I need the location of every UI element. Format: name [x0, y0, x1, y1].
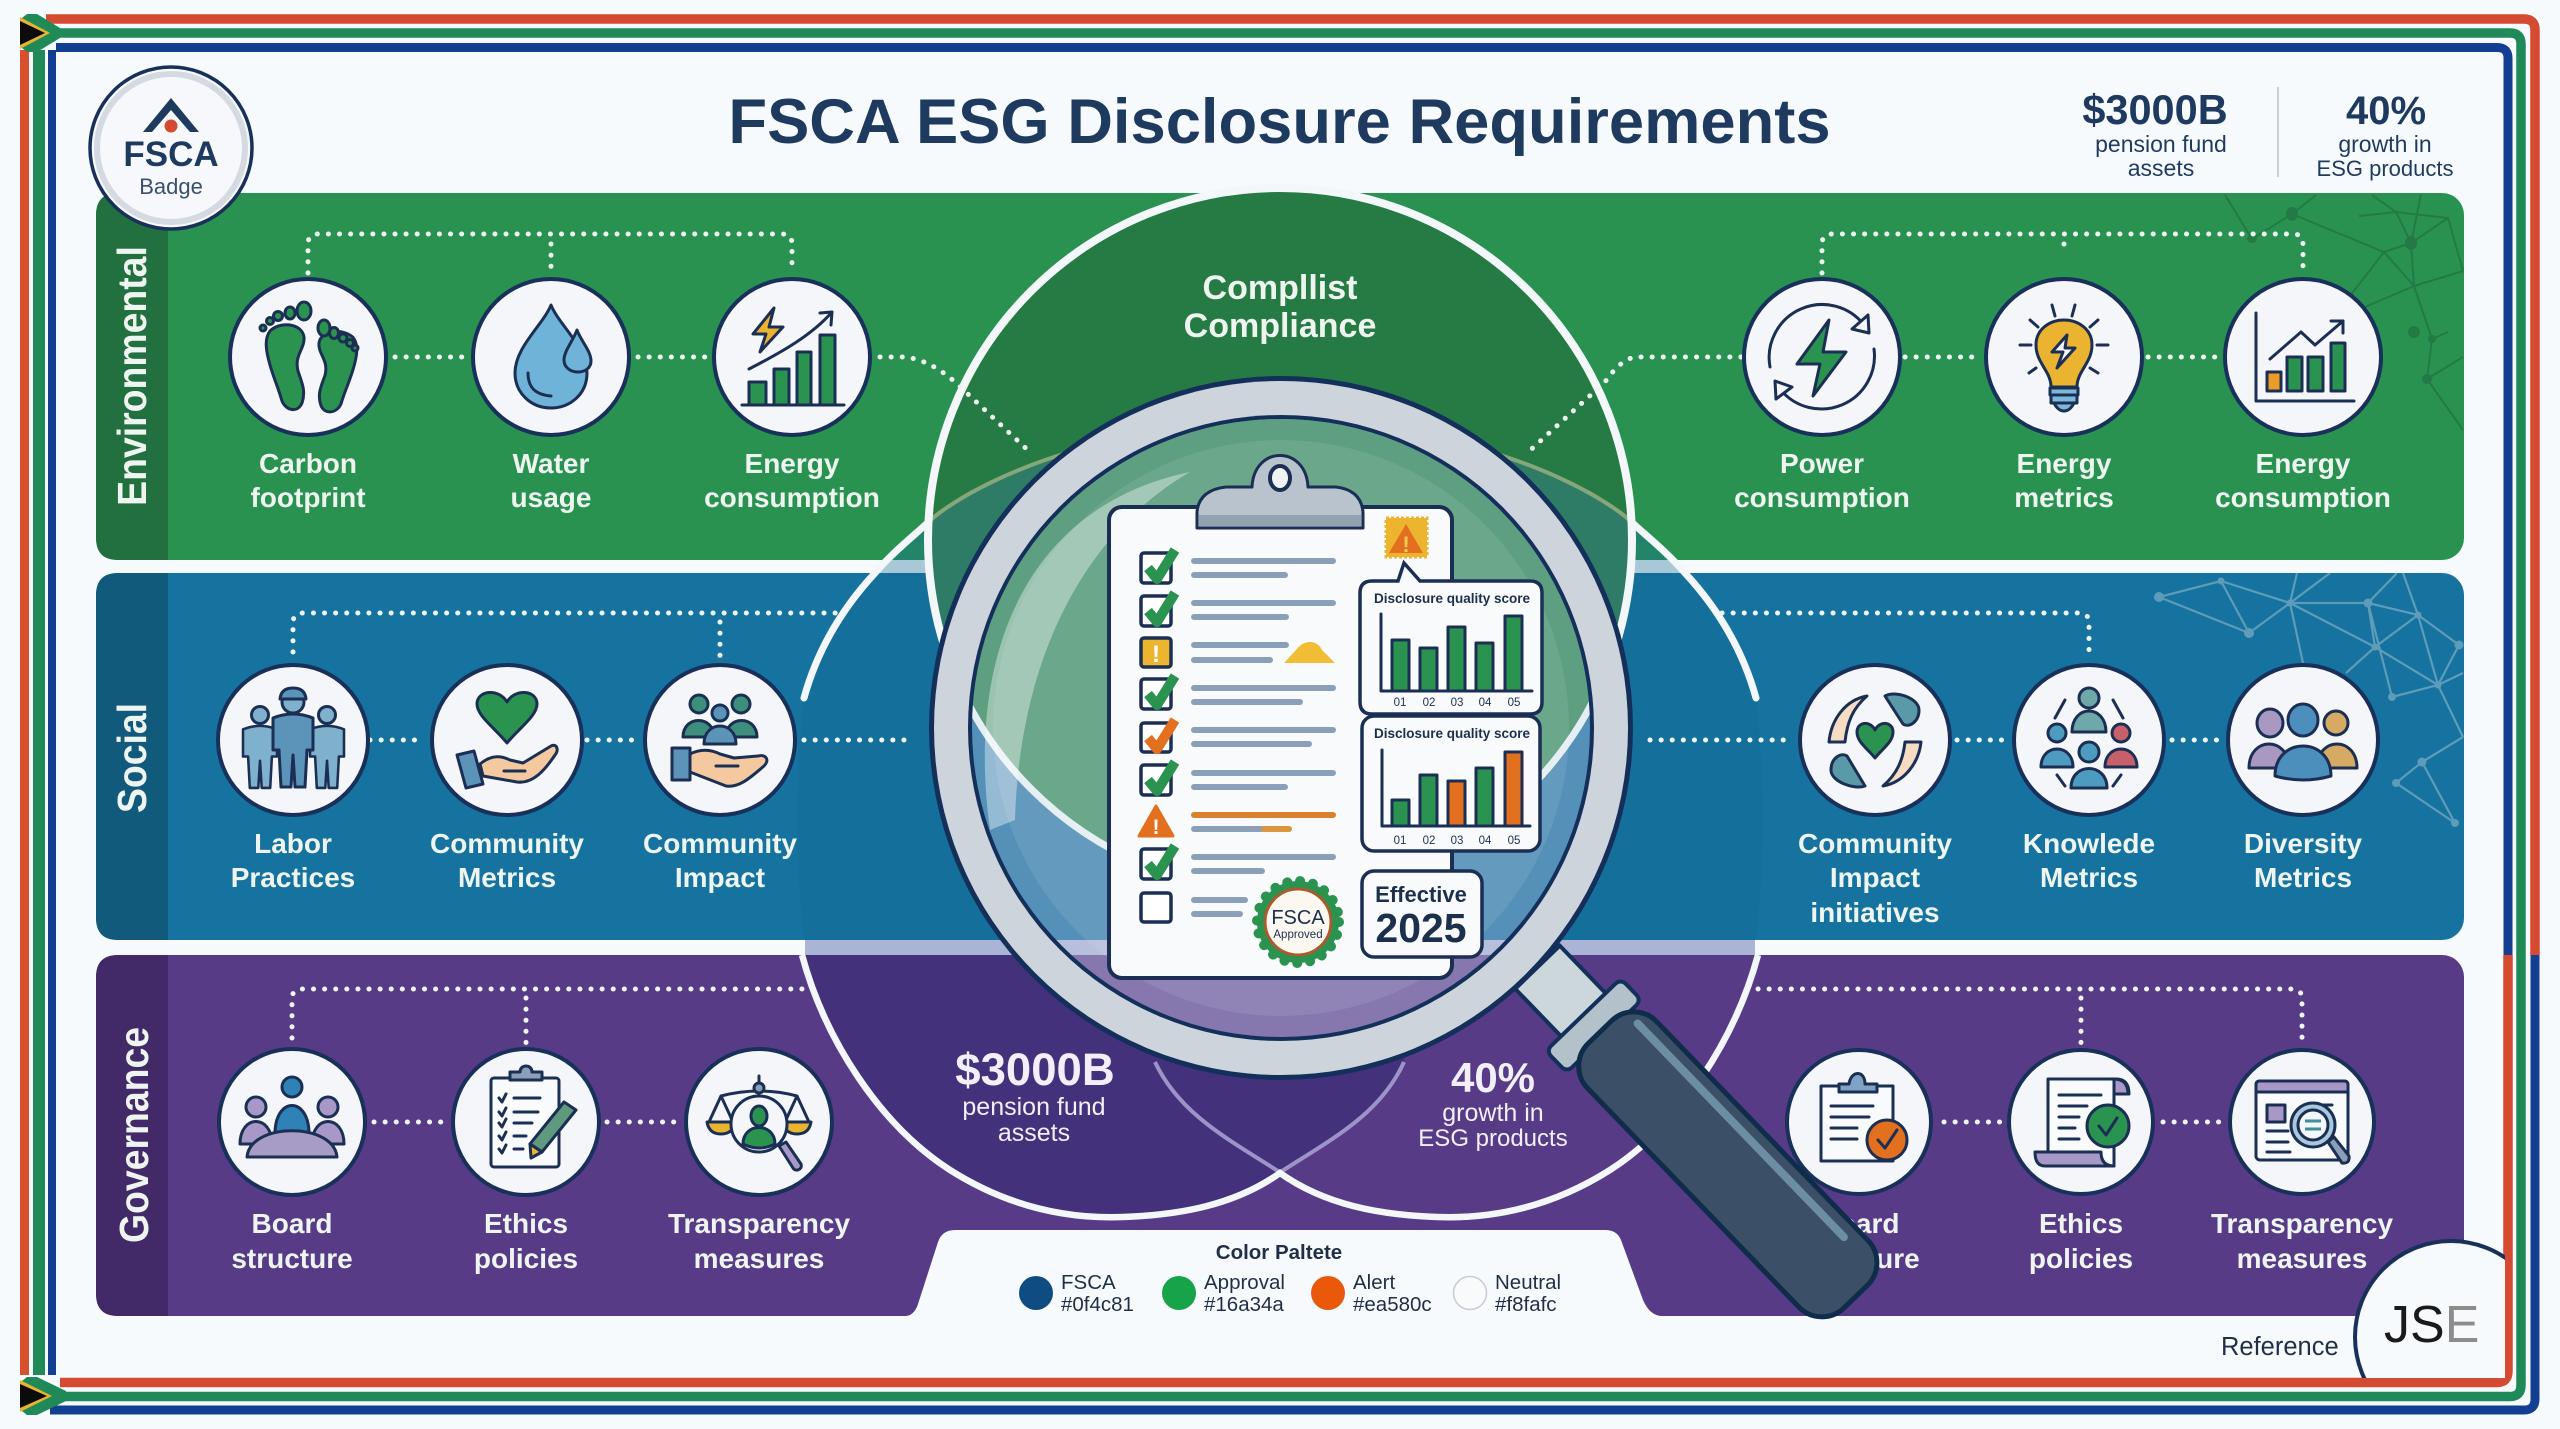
item: power consumption: consumption [1734, 482, 1910, 513]
bar chart: disclosure quality score 2: 03 [1451, 835, 1463, 847]
item: labor practices: Labor [254, 828, 332, 859]
network pattern: environmental [2225, 195, 2463, 430]
icon: warning sticker [1386, 518, 1427, 557]
bar chart: disclosure quality score 2 [1362, 716, 1540, 851]
item: energy consumption: consumption [704, 482, 880, 513]
venn stat: pension fund assets [955, 1044, 1115, 1147]
item: board structure right: Board [1819, 1208, 1899, 1239]
bar chart: disclosure quality score 1: 01 [1394, 697, 1406, 709]
item: labor practices: Practices [231, 862, 355, 893]
venn: social dome [797, 420, 1763, 940]
compliance heading [1184, 269, 1376, 345]
header stats: pension fund [2095, 131, 2227, 157]
item: community metrics [430, 665, 584, 893]
icon: energy growth bars [742, 308, 844, 405]
bar chart: disclosure quality score 1: 04 [1479, 697, 1492, 709]
checklist rows: ! [1152, 641, 1160, 668]
item: ethics policies: policies [474, 1243, 578, 1274]
legend: color palette: Color Paltete [1216, 1241, 1342, 1264]
legend: color palette: #0f4c81 [1061, 1293, 1134, 1316]
legend: color palette: Neutral [1495, 1271, 1561, 1294]
heading: environmental: Environmental [109, 246, 155, 506]
header stats: assets [2128, 155, 2194, 181]
item: community impact [643, 665, 797, 893]
item: transparency measures right: Transparency [2211, 1208, 2393, 1239]
badge: JSE reference: JSE [2384, 1296, 2479, 1354]
legend: color palette: Alert [1353, 1271, 1395, 1294]
dotted connectors: environmental [308, 234, 2303, 455]
badge: JSE reference [2353, 1239, 2505, 1378]
bar chart: disclosure quality score 1 [1360, 563, 1542, 714]
icon: board table [240, 1077, 344, 1157]
item: energy consumption: Energy [745, 448, 840, 479]
seal: FSCA approved: Approved [1273, 929, 1323, 941]
badge: FSCA: FSCA [123, 135, 219, 174]
callout: effective 2025: Effective [1375, 882, 1467, 907]
venn stat: pension fund assets: $3000B [955, 1044, 1115, 1095]
lens glass [972, 419, 1590, 1037]
item: diversity metrics: Metrics [2254, 862, 2352, 893]
venn stat: pension fund assets: pension fund [962, 1093, 1106, 1121]
panel: environmental [96, 193, 2464, 560]
venn: governance lobes [802, 955, 1758, 1217]
item: energy consumption right: Energy [2256, 448, 2351, 479]
compliance heading: Compliance [1184, 307, 1376, 345]
item: community impact initiatives: initiatives [1810, 897, 1940, 928]
venn: compliance circle [924, 192, 1636, 644]
item: board structure: structure [231, 1243, 353, 1274]
header stats: growth in [2338, 131, 2432, 157]
venn stat: ESG product growth [1418, 1054, 1568, 1152]
bar chart: disclosure quality score 1: 05 [1508, 697, 1520, 709]
icon: document with approval [1821, 1074, 1907, 1161]
item: ethics policies [453, 1049, 599, 1274]
bar chart: disclosure quality score 2: Disclosure quality score [1374, 726, 1531, 741]
venn stat: pension fund assets: assets [998, 1119, 1070, 1147]
bar chart: disclosure quality score 2: 01 [1394, 835, 1406, 847]
item: energy consumption right [2215, 279, 2391, 513]
item: knowledge metrics: Metrics [2040, 862, 2138, 893]
bar chart: disclosure quality score 1: 03 [1451, 697, 1463, 709]
bar chart: disclosure quality score 1: Disclosure quality score [1374, 591, 1531, 606]
magnifier handle [1500, 931, 1893, 1333]
icon: people in hand [672, 695, 767, 786]
legend: color palette: Approval [1204, 1271, 1285, 1294]
icon: checklist with pencil [491, 1066, 576, 1167]
bar chart: disclosure quality score 2: 04 [1479, 835, 1492, 847]
callout: effective 2025: 2025 [1375, 905, 1467, 951]
icon: footprints [260, 302, 358, 412]
item: transparency measures right [2211, 1050, 2393, 1274]
item: ethics policies right: Ethics [2039, 1208, 2123, 1239]
icon: scales and person [707, 1076, 811, 1170]
item: power consumption: Power [1780, 448, 1864, 479]
checklist rows: ! [1152, 816, 1160, 839]
network pattern: social [2154, 573, 2464, 827]
header stats [2082, 86, 2453, 181]
item: transparency measures: measures [694, 1243, 824, 1274]
compliance heading: Compllist [1203, 269, 1357, 307]
seal: FSCA approved [1257, 881, 1339, 963]
item: transparency measures: Transparency [668, 1208, 850, 1239]
item: ethics policies right [2009, 1050, 2153, 1274]
item: energy metrics: Energy [2017, 448, 2112, 479]
dotted connectors: social [293, 613, 2222, 740]
legend: color palette: #ea580c [1353, 1293, 1432, 1316]
icon: power cycle [1769, 305, 1874, 409]
item: energy consumption right: consumption [2215, 482, 2391, 513]
clipboard [1109, 456, 1452, 978]
icon: scroll with check [2035, 1079, 2129, 1166]
icon: heart with caring hands [1829, 694, 1921, 787]
header stats: 40% [2346, 89, 2426, 133]
legend: color palette: #16a34a [1204, 1293, 1284, 1316]
legend: color palette: FSCA [1061, 1271, 1116, 1294]
seal: FSCA approved: FSCA [1271, 907, 1325, 929]
item: carbon footprint: footprint [250, 482, 366, 513]
item: energy metrics [1986, 279, 2142, 513]
icon: warning sticker: ! [1402, 532, 1410, 557]
reference label: Reference [2221, 1333, 2339, 1361]
item: community impact initiatives [1798, 665, 1952, 928]
bar chart: disclosure quality score 2: 02 [1423, 835, 1435, 847]
heading: governance: Governance [111, 1027, 157, 1243]
icon: light bulb [2020, 305, 2108, 411]
icon: heart in hand [457, 692, 557, 788]
bar chart: disclosure quality score 2: 05 [1508, 835, 1520, 847]
item: energy metrics: metrics [2014, 482, 2114, 513]
item: board structure right [1787, 1050, 1931, 1274]
item: water usage: usage [511, 482, 591, 513]
icon: water drop [515, 305, 591, 408]
item: board structure right: structure [1798, 1243, 1920, 1274]
legend: color palette [895, 1230, 1665, 1320]
header stats: $3000B [2082, 86, 2228, 133]
heading: social: Social [109, 703, 155, 813]
icon: diverse group [2249, 704, 2357, 780]
item: knowledge metrics: Knowlede [2023, 828, 2155, 859]
venn stat: ESG product growth: growth in [1442, 1099, 1544, 1127]
item: ethics policies: Ethics [484, 1208, 568, 1239]
panel: social [96, 573, 2464, 940]
item: ethics policies right: policies [2029, 1243, 2133, 1274]
callout: effective 2025 [1362, 871, 1482, 957]
item: community metrics: Community [430, 828, 584, 859]
venn stat: ESG product growth: 40% [1451, 1054, 1535, 1101]
venn stat: ESG product growth: ESG products [1418, 1125, 1568, 1152]
icon: chart with trend arrow [2256, 313, 2354, 401]
item: carbon footprint: Carbon [259, 448, 357, 479]
badge: FSCA: Badge [139, 174, 203, 199]
icon: workers [243, 688, 344, 788]
item: community metrics: Metrics [458, 862, 556, 893]
legend: color palette: #f8fafc [1495, 1293, 1557, 1316]
item: power consumption [1734, 279, 1910, 513]
checklist rows [1139, 550, 1335, 922]
item: transparency measures [668, 1049, 850, 1274]
item: diversity metrics [2228, 665, 2378, 893]
item: board structure: Board [252, 1208, 332, 1239]
badge: FSCA [90, 67, 252, 229]
item: community impact initiatives: Impact [1830, 862, 1920, 893]
item: board structure [219, 1049, 365, 1274]
icon: knowledge network people [2041, 688, 2137, 788]
item: community impact initiatives: Community [1798, 828, 1952, 859]
magnifier lens with clipboard [929, 376, 1633, 1080]
item: water usage: Water [513, 448, 589, 479]
venn: lavender band between panels [805, 940, 1755, 955]
item: community impact: Impact [675, 862, 765, 893]
panel: governance [96, 955, 2464, 1316]
bar chart: disclosure quality score 1: 02 [1423, 697, 1435, 709]
item: energy consumption [704, 279, 880, 513]
item: water usage [473, 279, 629, 513]
dotted connectors: governance [292, 989, 2302, 1122]
item: carbon footprint [230, 279, 386, 513]
item: diversity metrics: Diversity [2244, 828, 2363, 859]
item: community impact: Community [643, 828, 797, 859]
icon: browser with magnifier [2256, 1081, 2349, 1163]
title: FSCA ESG Disclosure Requirements [728, 87, 1831, 157]
icon: roof logo [143, 98, 199, 132]
item: knowledge metrics [2014, 665, 2164, 893]
item: transparency measures right: measures [2237, 1243, 2367, 1274]
item: labor practices [218, 665, 368, 893]
header stats: ESG products [2317, 156, 2453, 181]
